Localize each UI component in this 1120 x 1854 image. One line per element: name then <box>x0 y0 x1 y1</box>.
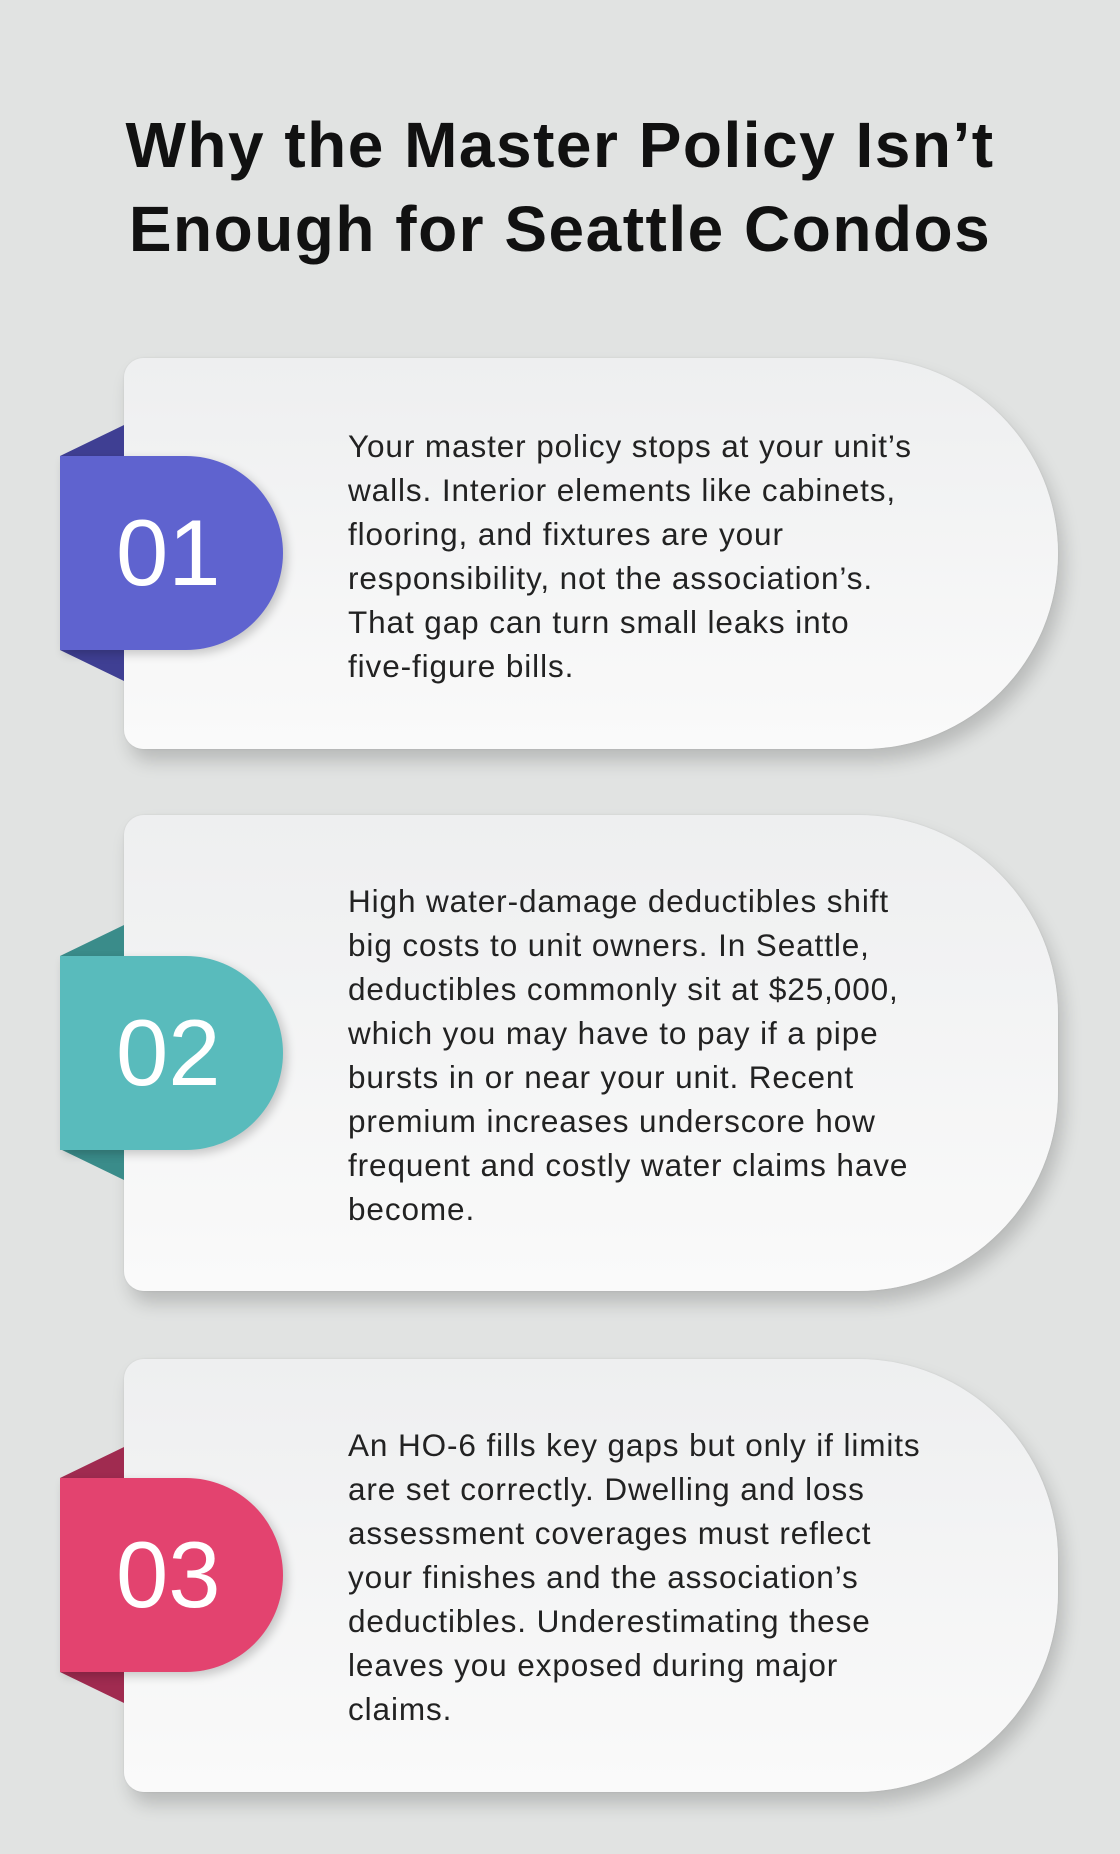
title: Why the Master Policy Isn’t <box>125 109 995 181</box>
text 2 <box>348 883 908 1227</box>
fold top 3 <box>60 1447 124 1478</box>
text 2: which you may have to pay if a pipe <box>348 1015 879 1051</box>
text 2: premium increases underscore how <box>348 1103 876 1139</box>
text 1 <box>348 428 912 684</box>
badge 03: 03 <box>116 1522 221 1627</box>
text 3: An HO-6 fills key gaps but only if limits <box>348 1427 921 1463</box>
fold top 1 <box>60 425 124 456</box>
text 1: five-figure bills. <box>348 648 574 684</box>
badge 01 <box>60 456 283 650</box>
text 3: claims. <box>348 1691 452 1727</box>
fold bottom 1 <box>60 650 124 681</box>
text 1: That gap can turn small leaks into <box>348 604 850 640</box>
title: Enough for Seattle Condos <box>129 193 991 265</box>
text 1: responsibility, not the association’s. <box>348 560 873 596</box>
fold top 2 <box>60 925 124 956</box>
text 2: become. <box>348 1191 475 1227</box>
text 3 <box>348 1427 921 1727</box>
text 2: big costs to unit owners. In Seattle, <box>348 927 870 963</box>
panel: card 2 <box>124 815 1058 1291</box>
badge 02 <box>60 956 283 1150</box>
badge 03 <box>60 1478 283 1672</box>
fold bottom 3 <box>60 1672 124 1703</box>
panel: card 1 <box>124 358 1058 749</box>
text 3: deductibles. Underestimating these <box>348 1603 871 1639</box>
text 3: are set correctly. Dwelling and loss <box>348 1471 865 1507</box>
text 3: assessment coverages must reflect <box>348 1515 871 1551</box>
text 2: High water-damage deductibles shift <box>348 883 889 919</box>
text 1: Your master policy stops at your unit’s <box>348 428 912 464</box>
fold bottom 2 <box>62 1150 124 1180</box>
text 3: leaves you exposed during major <box>348 1647 838 1683</box>
text 3: your finishes and the association’s <box>348 1559 859 1595</box>
badge 02: 02 <box>116 1000 221 1105</box>
panel: card 3 <box>124 1359 1058 1792</box>
title <box>125 109 995 265</box>
text 2: bursts in or near your unit. Recent <box>348 1059 854 1095</box>
text 1: walls. Interior elements like cabinets, <box>348 472 896 508</box>
text 2: frequent and costly water claims have <box>348 1147 908 1183</box>
text 2: deductibles commonly sit at $25,000, <box>348 971 899 1007</box>
badge 01: 01 <box>116 500 221 605</box>
text 1: flooring, and fixtures are your <box>348 516 784 552</box>
